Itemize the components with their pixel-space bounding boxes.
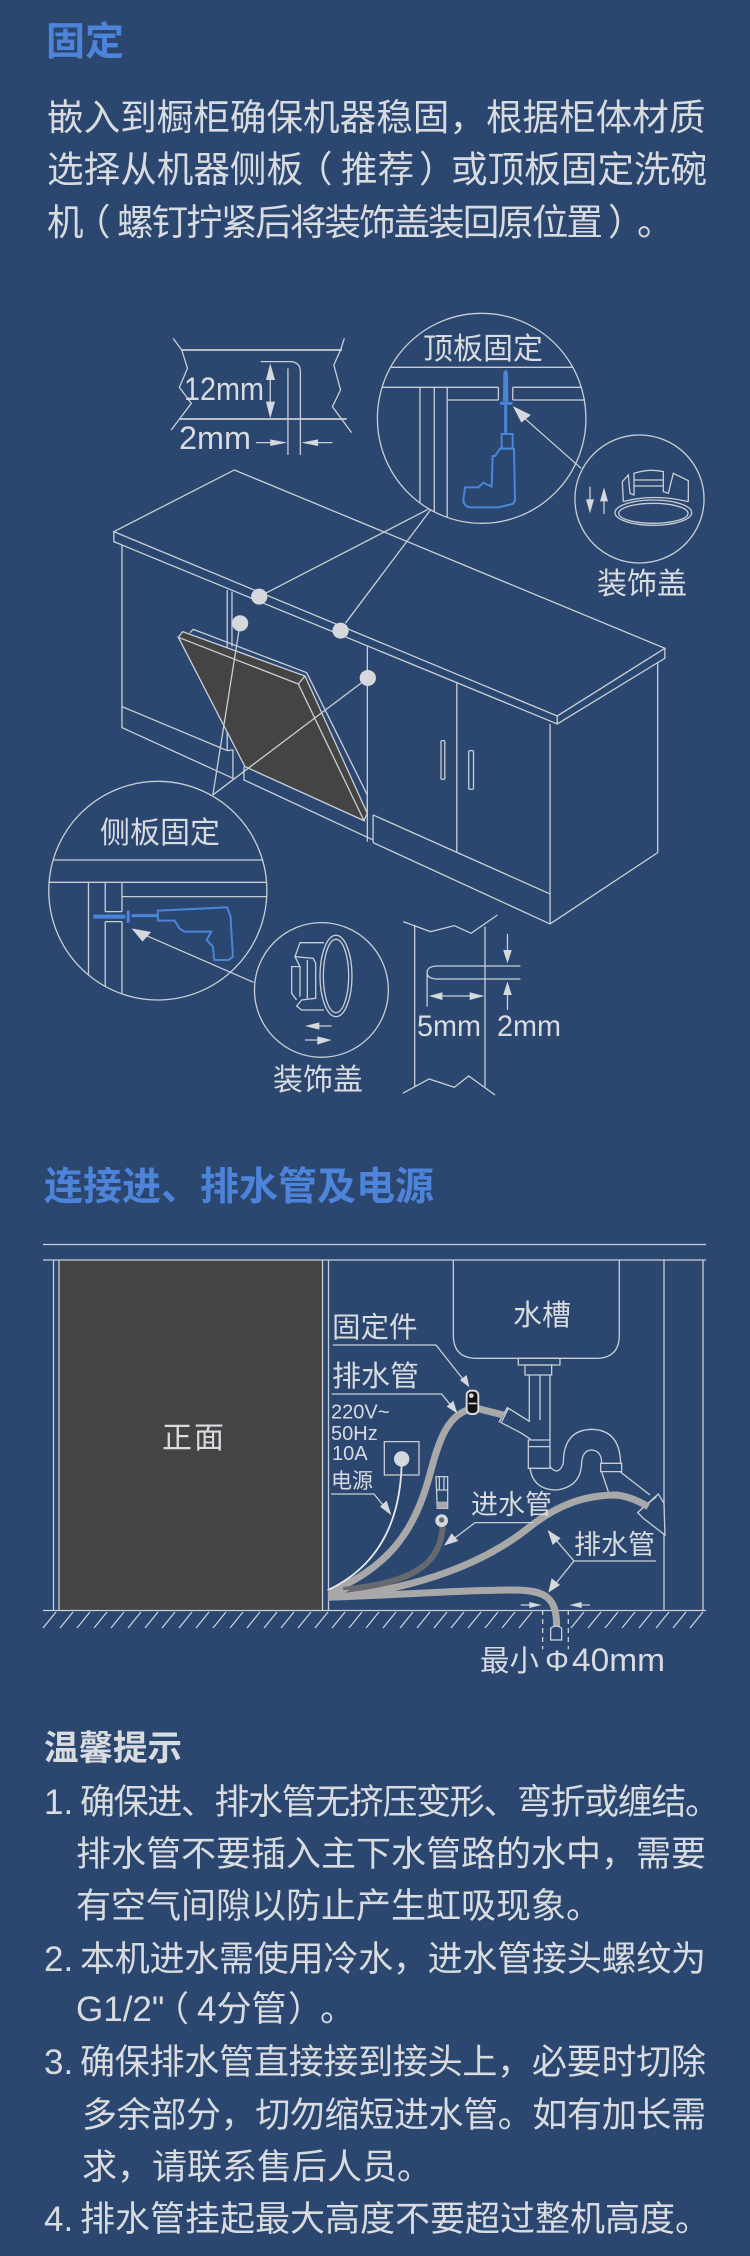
- callout: 12mm / 2mm slot dimension: 2mm: [179, 420, 251, 456]
- tip 3: 3.: [44, 2043, 73, 2082]
- callout: 装饰盖, top: 装饰盖: [597, 568, 687, 601]
- panel: installation diagram: [48, 313, 704, 1097]
- drain pipe end: [551, 1626, 562, 1640]
- tip 3: 求，请联系售后人员。: [82, 2148, 432, 2187]
- icon: socket: [384, 1442, 419, 1475]
- tip 1: [44, 1783, 720, 1926]
- label: power rating: 10A: [332, 1443, 368, 1465]
- tip 2: ）: [288, 1990, 323, 2029]
- label: minimum diameter dimension: 最小: [480, 1645, 539, 1678]
- callout: 顶板固定 circle: 顶板固定: [423, 333, 543, 366]
- tip 2: （: [154, 1990, 189, 2029]
- text block: intro: 选择从机器侧板: [47, 149, 303, 190]
- tip 1: 确保进、排水管无挤压变形、弯折或缠结。: [80, 1783, 720, 1822]
- tip 3: [44, 2043, 706, 2187]
- hoses: [328, 1408, 648, 1627]
- tip 4: 排水管挂起最大高度不要超过整机高度。: [80, 2200, 710, 2239]
- callout: 5mm / 2mm slot dimension: 2mm: [497, 1010, 561, 1043]
- tip 2: 本机进水需使用冷水，进水管接头螺纹为: [80, 1940, 706, 1979]
- callout: 装饰盖, side: 装饰盖: [273, 1064, 363, 1097]
- dishwasher door panel: [178, 629, 367, 821]
- tip 1: 排水管不要插入主下水管路的水中，需要: [76, 1835, 706, 1874]
- callout: 侧板固定 circle: 侧板固定: [100, 817, 220, 850]
- callout: 5mm / 2mm slot dimension: 5mm: [417, 1010, 481, 1043]
- label: 排水管 (lower) with leader: 排水管: [574, 1530, 655, 1560]
- text block: intro: （: [74, 202, 111, 243]
- counter and floor lines: [43, 1244, 706, 1628]
- tip 4: 4.: [44, 2200, 73, 2239]
- label: 水槽: 水槽: [513, 1299, 571, 1332]
- label: 固定件 with leader: [332, 1312, 469, 1387]
- front dark machine: [59, 1260, 322, 1610]
- drain trap: [499, 1375, 665, 1535]
- label: power rating: 220V~: [331, 1402, 389, 1424]
- callout: 顶板固定 circle: [377, 313, 586, 523]
- tip 2: G1/2": [76, 1990, 164, 2029]
- label: 固定件 with leader: 固定件: [332, 1312, 418, 1344]
- callout: 12mm / 2mm slot dimension: [171, 338, 352, 456]
- tip 2: 。: [320, 1990, 355, 2029]
- icon: drill, top: [463, 370, 515, 507]
- callout: 12mm / 2mm slot dimension: 12mm: [184, 371, 264, 407]
- label: 进水管 with leader: 进水管: [471, 1490, 552, 1520]
- tip 2: 4分管: [197, 1990, 286, 2029]
- text block: intro: 或顶板固定洗碗: [451, 149, 707, 190]
- callout: 侧板固定 circle: [48, 781, 268, 1000]
- callout: 5mm / 2mm slot dimension: [403, 915, 561, 1095]
- text block: intro: 。: [637, 202, 674, 243]
- tip 2: 2.: [44, 1940, 73, 1979]
- label: power rating: 电源: [331, 1470, 373, 1493]
- label: 正面: 正面: [162, 1422, 224, 1455]
- heading: 固定: 固定: [46, 21, 124, 64]
- label: power rating: 50Hz: [331, 1423, 378, 1445]
- tip 3: 确保排水管直接接到接头上，必要时切除: [80, 2043, 706, 2082]
- label: minimum diameter dimension: [480, 1602, 665, 1678]
- icon: drill, side: [93, 907, 233, 960]
- tip 3: 多余部分，切勿缩短进水管。如有加长需: [82, 2096, 706, 2135]
- icon: clamp: [467, 1391, 478, 1414]
- text block: intro: 螺钉拧紧后将装饰盖装回原位置: [117, 202, 603, 243]
- tip 2: [44, 1940, 706, 2029]
- sink: [453, 1260, 619, 1375]
- text block: intro: （: [296, 149, 333, 190]
- text block: intro: [47, 97, 707, 243]
- cabinet with countertop: [114, 470, 665, 924]
- label: 排水管 (upper) with leader: [332, 1360, 457, 1413]
- label: minimum diameter dimension: 40mm: [572, 1642, 665, 1678]
- panel: plumbing diagram: [43, 1244, 706, 1678]
- text block: intro: 嵌入到橱柜确保机器稳固，根据柜体材质: [47, 97, 705, 138]
- tip 1: 有空气间隙以防止产生虹吸现象。: [76, 1887, 601, 1926]
- icon: decorative cap, side: [292, 935, 352, 1045]
- label: minimum diameter dimension: Φ: [545, 1645, 569, 1678]
- text block: intro: ）: [419, 149, 456, 190]
- label: power rating: [331, 1402, 391, 1515]
- callout: 装饰盖, top: [513, 406, 704, 601]
- heading: 连接进、排水管及电源: 连接进、排水管及电源: [44, 1166, 434, 1209]
- connector lines and dots: [213, 509, 430, 795]
- label: 排水管 (lower) with leader: [548, 1530, 656, 1593]
- tips heading: 温馨提示: 温馨提示: [44, 1730, 182, 1768]
- tip 1: 1.: [44, 1783, 73, 1822]
- tips list: [44, 1783, 720, 2239]
- label: 进水管 with leader: [444, 1490, 552, 1546]
- icon: decorative cap, top: [586, 470, 692, 525]
- callout: 装饰盖, side: [132, 923, 388, 1097]
- text block: intro: ）: [608, 202, 645, 243]
- label: 排水管 (upper) with leader: 排水管: [332, 1360, 419, 1393]
- text block: intro: 机: [47, 202, 84, 243]
- text block: intro: 推荐: [341, 149, 414, 190]
- icon: inlet connector: [435, 1477, 448, 1527]
